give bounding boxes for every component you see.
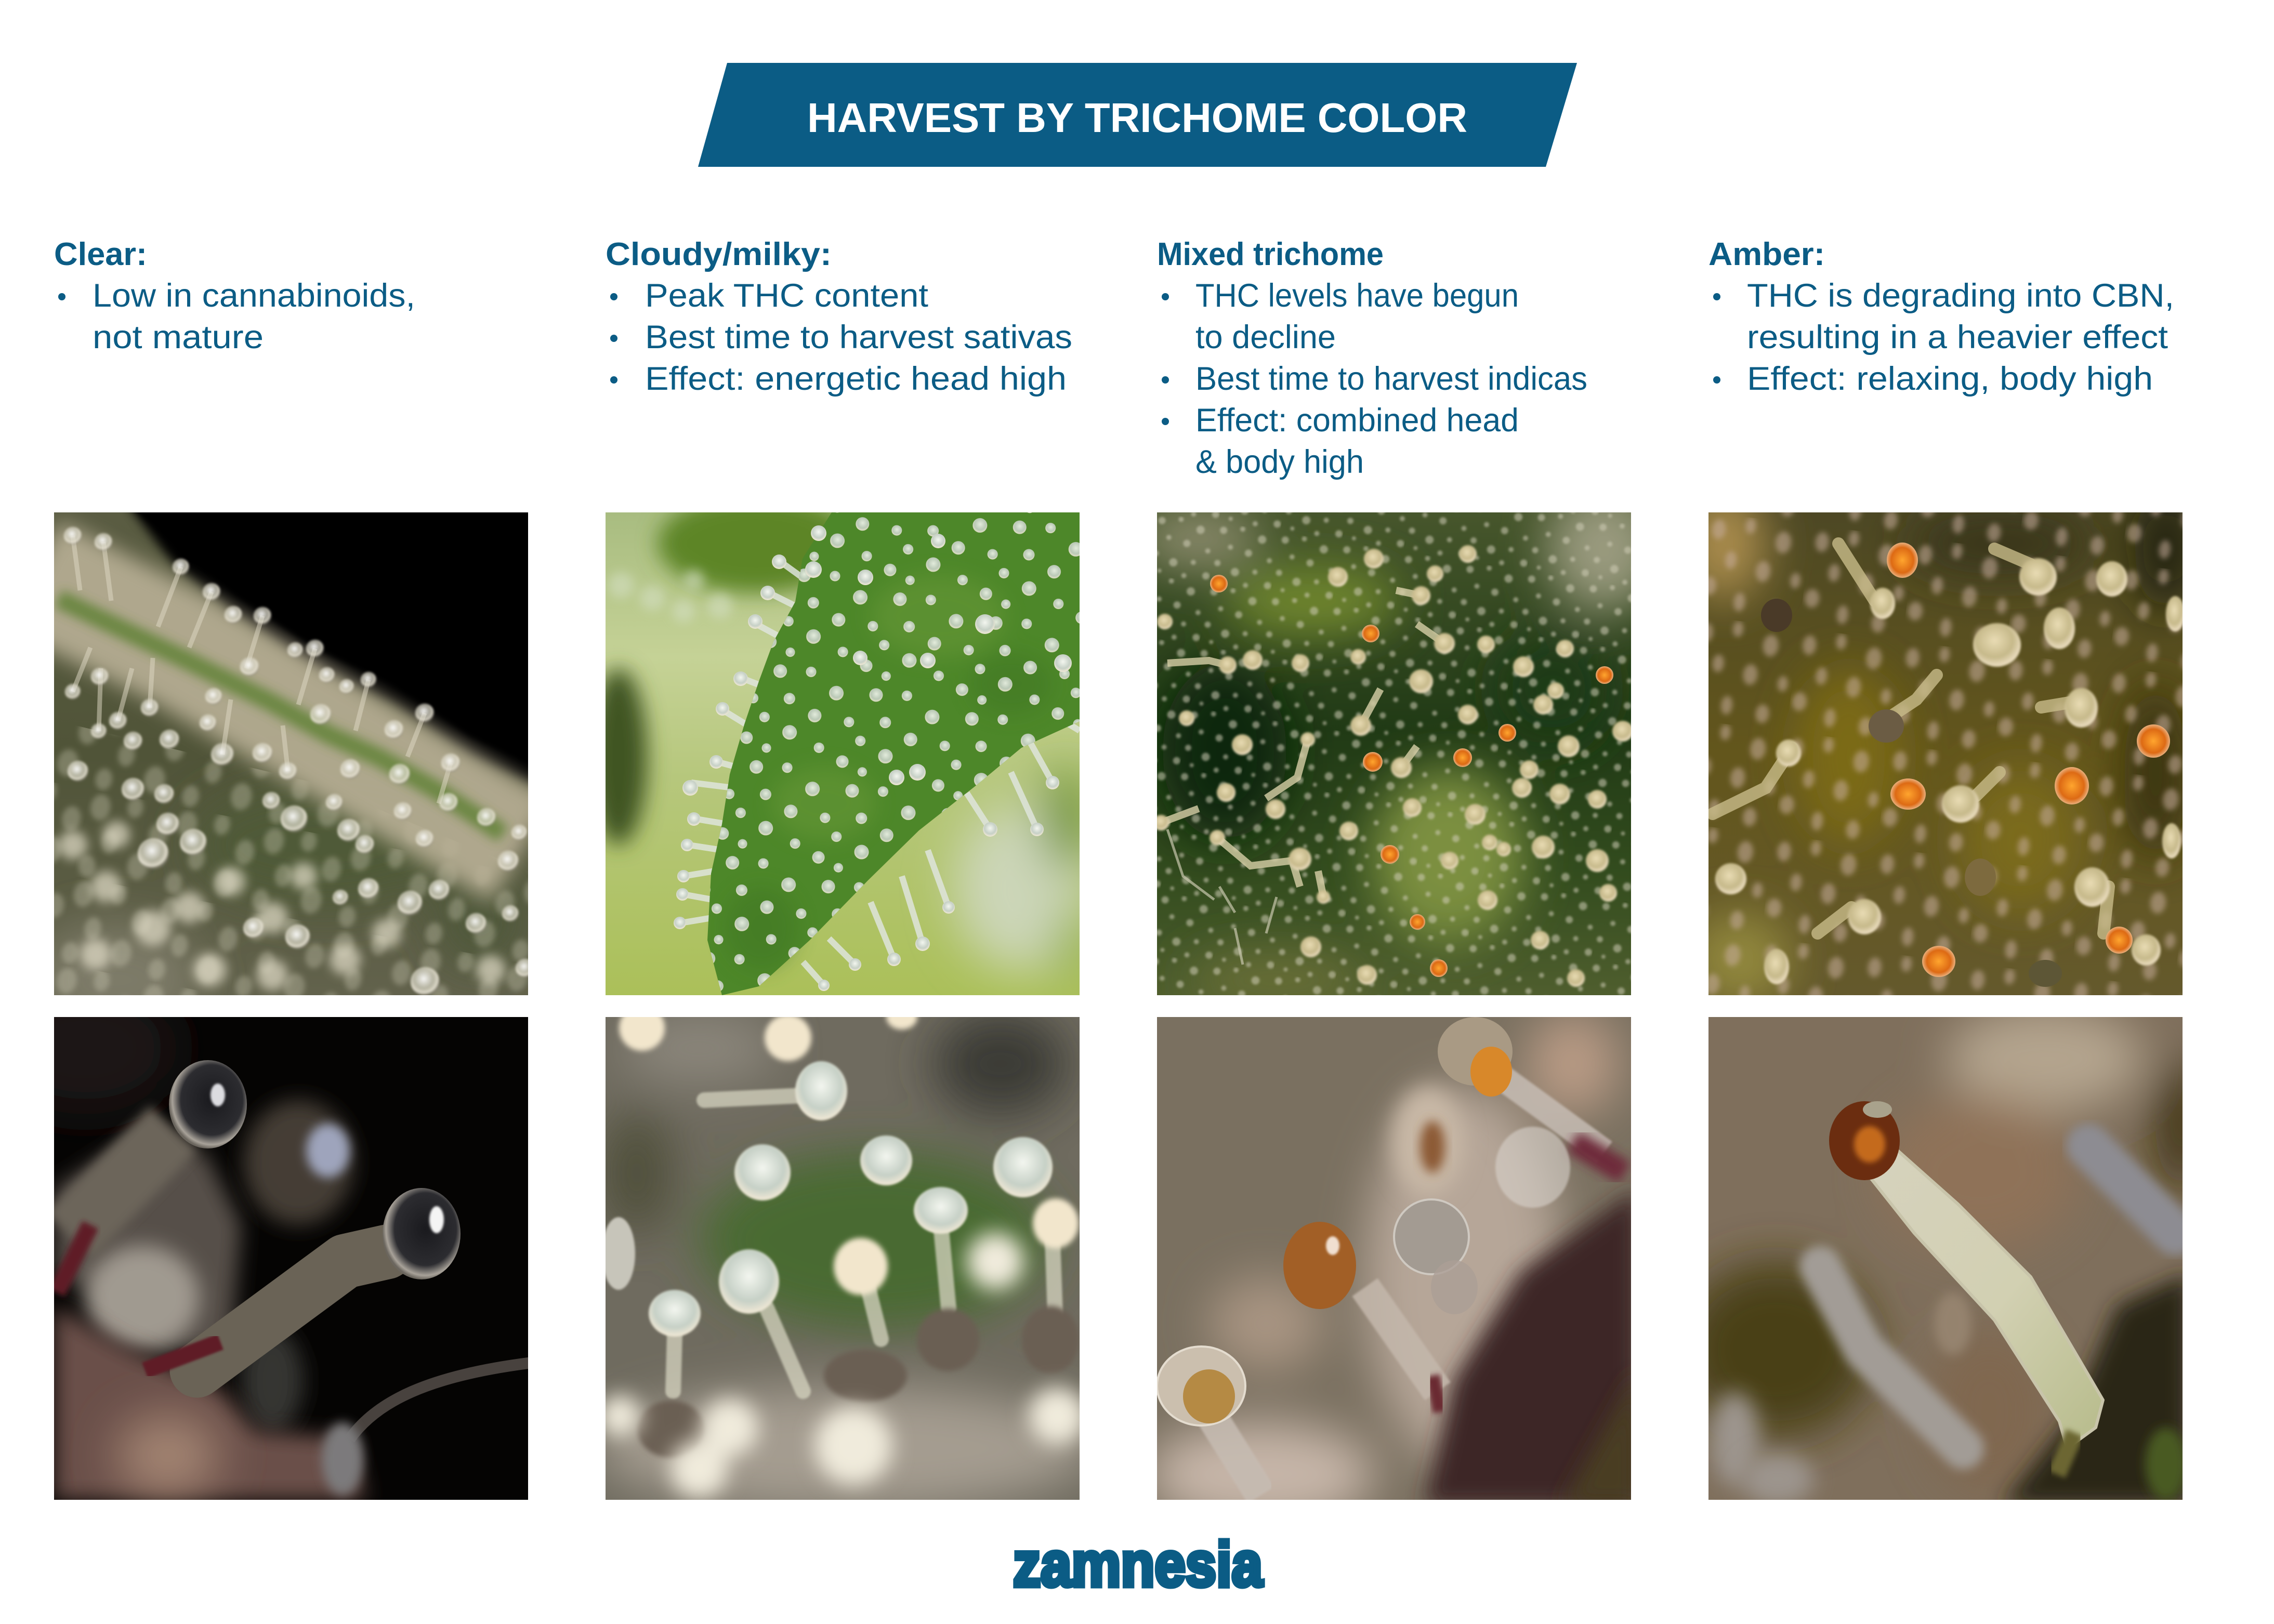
column text: clear: not mature: [93, 319, 264, 355]
photo: cloudy trichomes on green leaf: [590, 494, 1089, 995]
zamnesia logo: zamnesia: [1013, 1529, 1263, 1600]
column text: clear: [54, 236, 415, 355]
column text: amber: resulting in a heavier effect: [1747, 319, 2168, 355]
column text: amber: Effect: relaxing, body high: [1747, 361, 2153, 397]
column text: amber: [1708, 236, 2174, 397]
photo: clear trichome close-up: [0, 981, 532, 1500]
column text: cloudy/milky: Best time to harvest sativas: [645, 319, 1072, 355]
photo: cloudy trichome close-up: [595, 1005, 1094, 1511]
column text: amber: Amber:: [1708, 236, 1825, 272]
column text: clear: Low in cannabinoids,: [93, 278, 415, 314]
column text: mixed trichome: & body high: [1195, 444, 1364, 480]
photo: mixed trichomes: [1136, 486, 1661, 1006]
column text: cloudy/milky: Peak THC content: [645, 278, 929, 314]
column text: mixed trichome: Best time to harvest indicas: [1195, 361, 1587, 397]
column text: cloudy/milky: Cloudy/milky:: [606, 236, 832, 272]
column text: clear: Clear:: [54, 236, 147, 272]
column text: mixed trichome: THC levels have begun: [1195, 278, 1519, 314]
title banner: [698, 63, 1577, 167]
column text: mixed trichome: [1157, 236, 1587, 480]
photo: amber trichomes: [1683, 486, 2197, 1006]
column text: mixed trichome: to decline: [1195, 319, 1336, 355]
column text: amber: THC is degrading into CBN,: [1747, 278, 2174, 314]
column text: mixed trichome: Mixed trichome: [1157, 236, 1384, 272]
column text: cloudy/milky: Effect: energetic head high: [645, 361, 1067, 397]
column text: mixed trichome: Effect: combined head: [1195, 402, 1519, 439]
photo: amber trichome close-up: [1677, 1007, 2207, 1506]
photo: clear trichomes on ridge: [54, 512, 528, 995]
photo: mixed trichome close-up: [1147, 1012, 1638, 1526]
column text: cloudy/milky: [606, 236, 1072, 397]
title text: HARVEST BY TRICHOME COLOR: [807, 95, 1467, 141]
